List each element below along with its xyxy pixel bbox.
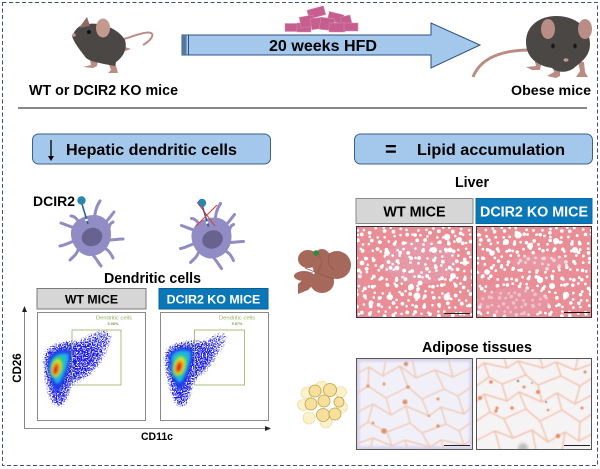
icon: dendritic cell with DCIR2: [60, 196, 123, 266]
heading: Lipid accumulation: =: [385, 139, 397, 161]
tag: DCIR2 KO mice flow: DCIR2 KO MICE: [167, 292, 260, 306]
tag: DCIR2 KO mice liver: [476, 198, 592, 224]
chart: WT flow cytometry plot: Dendritic cells: [96, 316, 132, 322]
icon: dendritic cell without DCIR2: [180, 199, 244, 268]
tag: WT mice liver: [356, 198, 473, 224]
tag: DCIR2 KO mice liver: DCIR2 KO MICE: [480, 204, 588, 220]
heading: Lipid accumulation: [354, 134, 592, 164]
micrograph: KO adipose: [475, 358, 592, 453]
arrow: 20 weeks HFD: 20 weeks HFD: [269, 38, 377, 55]
chart: WT flow cytometry plot: 9.08%: [108, 322, 119, 326]
heading: Hepatic dendritic cells: Hepatic dendritic cells: [66, 142, 237, 159]
micrograph: WT liver: [356, 226, 473, 318]
micrograph: KO liver: [476, 226, 592, 318]
icon: liver: [294, 249, 351, 294]
chart: KO flow cytometry plot: Dendritic cells: [219, 316, 255, 322]
axis label: CD11c: CD11c: [141, 431, 173, 443]
label: WT or DCIR2 KO mice: WT or DCIR2 KO mice: [29, 83, 178, 99]
title: Adipose tissues: Adipose tissues: [422, 340, 532, 356]
icon: obese mouse: [473, 16, 592, 78]
heading: Lipid accumulation: Lipid accumulation: [417, 142, 565, 159]
chart: WT flow cytometry plot: [37, 312, 146, 421]
icon: adipocytes: [298, 381, 348, 428]
chart: KO flow cytometry plot: [160, 312, 269, 421]
title: Liver: Liver: [455, 175, 489, 191]
tag: WT mice flow: WT MICE: [65, 292, 118, 306]
divider: [18, 107, 587, 109]
chart: KO flow cytometry plot: 5.57%: [232, 322, 243, 326]
icon: lean mouse: [72, 17, 152, 73]
axis label: CD26: CD26: [12, 353, 24, 383]
icon: high fat diet blocks: [285, 6, 358, 32]
label: Obese mice: Obese mice: [511, 83, 591, 99]
heading: Hepatic dendritic cells: [32, 134, 270, 164]
tag: DCIR2 KO mice flow: [159, 288, 268, 309]
tag: WT mice liver: WT MICE: [383, 204, 446, 220]
label: Dendritic cells: Dendritic cells: [104, 270, 201, 287]
label: DCIR2: DCIR2: [33, 193, 75, 209]
micrograph: WT adipose: [356, 358, 473, 450]
arrow: 20 weeks HFD: [182, 23, 480, 68]
tag: WT mice flow: [37, 288, 146, 309]
axes: flow plots: [22, 306, 271, 431]
